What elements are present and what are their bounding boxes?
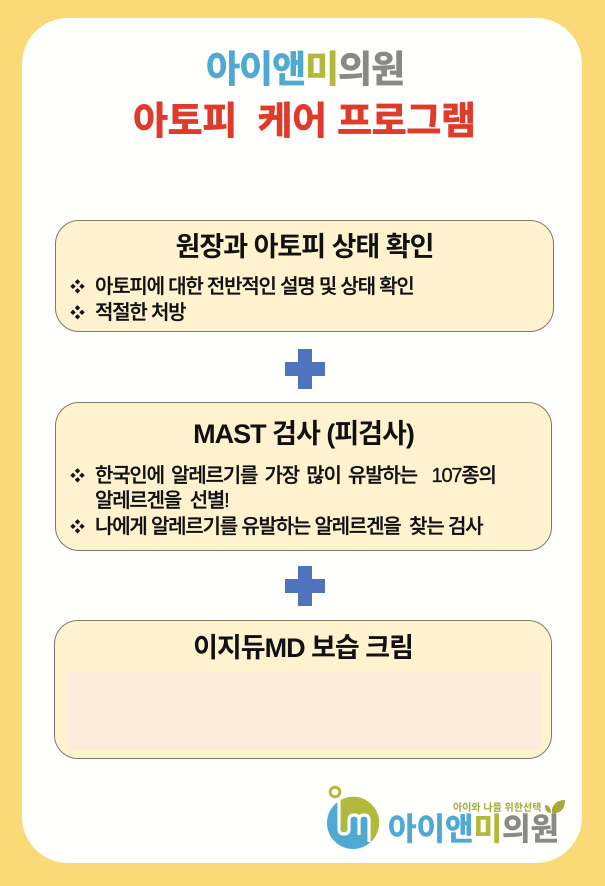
panel: MAST test — [55, 402, 552, 551]
logo — [327, 786, 565, 849]
bullet list: 알레르겐을 선별! — [95, 490, 228, 512]
bullet list: ❖ — [70, 468, 85, 485]
panel heading: 이지듀MD 보습 크림 — [193, 633, 413, 663]
bullet list: 적절한 처방 — [95, 302, 185, 324]
bullet list: ❖ — [70, 305, 85, 322]
title: program name: 아토피 케어 프로그램 — [133, 101, 476, 143]
panel heading: 원장과 아토피 상태 확인 — [176, 232, 433, 262]
panel: moisturizing cream — [54, 620, 552, 759]
image placeholder — [68, 672, 541, 750]
panel heading: MAST 검사 (피검사) — [193, 419, 414, 449]
icon: plus — [285, 566, 325, 606]
bullet list: 한국인에 알레르기를 가장 많이 유발하는 107종의 — [95, 465, 496, 487]
title: clinic name: 아이앤미의원 — [206, 49, 404, 90]
bullet list: 나에게 알레르기를 유발하는 알레르겐을 찾는 검사 — [95, 516, 482, 538]
bullet list: 아토피에 대한 전반적인 설명 및 상태 확인 — [95, 276, 414, 298]
panel: director consultation — [55, 220, 554, 332]
icon: leaf — [545, 800, 565, 813]
bullet list — [70, 465, 496, 538]
bullet list: ❖ — [70, 519, 85, 536]
logo mark — [327, 787, 379, 849]
bullet list: ❖ — [70, 279, 85, 296]
tagline: 아이와 나를 위한선택 — [453, 801, 541, 814]
logo wordmark: 아이앤미의원 — [388, 812, 559, 847]
bullet list — [70, 276, 414, 324]
icon: plus — [285, 349, 325, 389]
